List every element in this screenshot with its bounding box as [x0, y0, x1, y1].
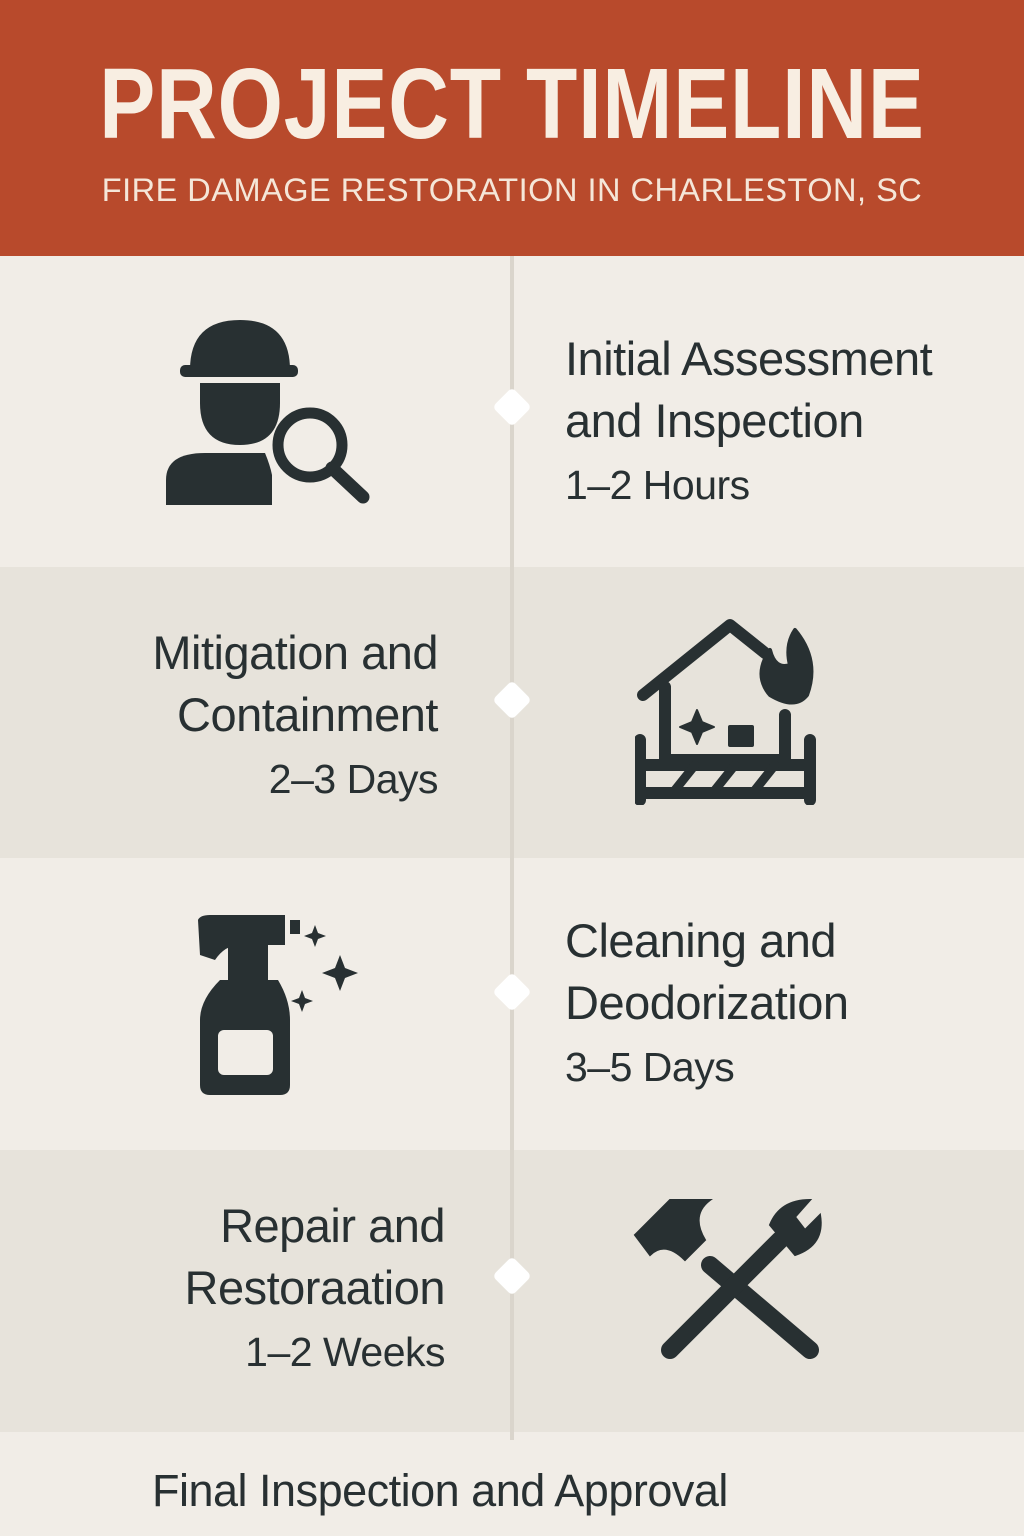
final step: Final Inspection and Approval — [152, 1465, 728, 1516]
icon: inspector — [166, 320, 370, 505]
icon: spray bottle — [198, 915, 358, 1095]
step 4 text: 1–2 Weeks — [245, 1329, 445, 1375]
step 3 text: Cleaning and — [565, 914, 836, 967]
step 1 text: and Inspection — [565, 394, 864, 447]
step 4 text — [184, 1199, 445, 1375]
step 2 text: Containment — [177, 688, 438, 741]
header — [0, 0, 1024, 256]
subtitle: FIRE DAMAGE RESTORATION IN CHARLESTON, SC — [102, 172, 922, 208]
step 3 text: 3–5 Days — [565, 1044, 734, 1090]
step 3 text: Deodorization — [565, 976, 849, 1029]
icon: burning house — [635, 619, 816, 805]
step 2 text: Mitigation and — [152, 626, 438, 679]
icon: hammer and wrench — [634, 1199, 822, 1359]
step 1 text — [565, 332, 932, 508]
step 1 text: 1–2 Hours — [565, 462, 750, 508]
step 1 text: Initial Assessment — [565, 332, 932, 385]
step 4 text: Repair and — [220, 1199, 445, 1252]
timeline line — [510, 256, 514, 1440]
title: PROJECT TIMELINE — [99, 48, 925, 160]
step 2 text — [152, 626, 438, 802]
step 4 text: Restoraation — [184, 1261, 445, 1314]
step 2 text: 2–3 Days — [269, 756, 438, 802]
step 3 text — [565, 914, 849, 1090]
